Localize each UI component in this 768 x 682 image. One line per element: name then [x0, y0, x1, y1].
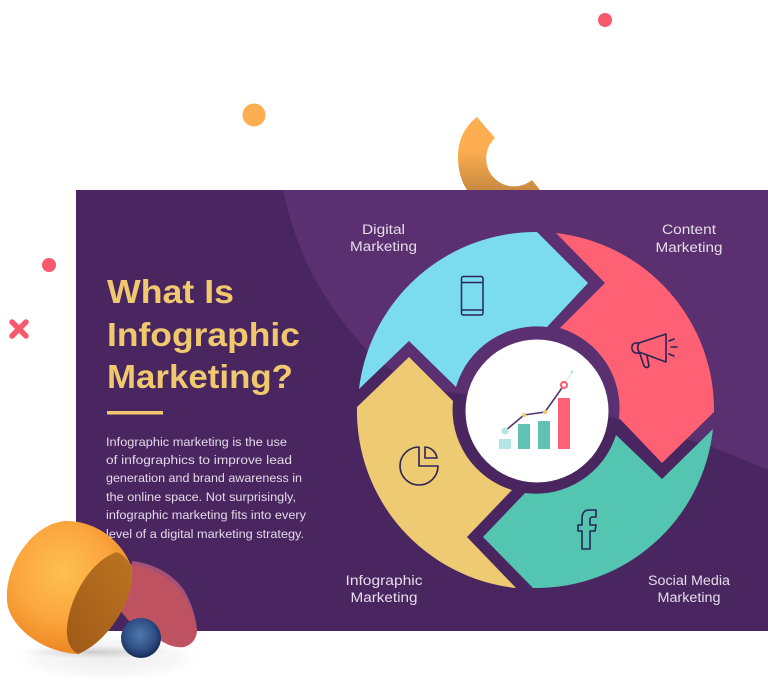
description text: Infographic marketing is the use — [106, 435, 287, 449]
panel: purple background — [76, 190, 768, 631]
title divider — [107, 411, 163, 414]
3D shapes group — [7, 521, 208, 682]
label: social media marketing: Social Media — [648, 573, 730, 589]
title — [107, 274, 300, 396]
label: digital marketing: Marketing — [350, 239, 417, 255]
decorative dot: red top — [598, 13, 612, 27]
description text — [106, 435, 307, 541]
label: content marketing — [656, 222, 722, 256]
label: social media marketing — [648, 573, 730, 606]
decorative cross — [12, 322, 26, 336]
label: digital marketing — [350, 222, 417, 255]
label: infographic marketing: Infographic — [346, 573, 422, 589]
decorative dot: orange — [242, 104, 266, 126]
label: digital marketing: Digital — [362, 222, 405, 238]
segment: digital marketing (blue) — [359, 232, 588, 389]
decorative dot: red left — [42, 258, 56, 272]
icon: pie chart — [400, 447, 438, 485]
description text: infographic marketing fits into every — [106, 508, 307, 522]
label: content marketing: Marketing — [656, 240, 722, 256]
segment: social media marketing (teal) — [483, 429, 713, 588]
pink half disc rim — [130, 561, 197, 630]
icon: phone — [462, 276, 483, 315]
icon: megaphone — [632, 334, 677, 368]
blue ball — [121, 618, 161, 658]
icon: growth chart — [499, 370, 574, 449]
title: Infographic — [107, 317, 300, 354]
pink half disc — [120, 564, 197, 647]
description text: the online space. Not surprisingly, — [106, 490, 296, 504]
title: What Is — [107, 274, 234, 311]
description text: generation and brand awareness in — [106, 471, 302, 485]
ground shadow — [8, 634, 208, 682]
ground contact shadow — [20, 645, 170, 659]
description text: of infographics to improve lead — [106, 453, 292, 467]
label: infographic marketing — [346, 573, 422, 606]
orange half sphere — [7, 521, 132, 654]
label: content marketing: Content — [662, 222, 716, 238]
label: social media marketing: Marketing — [658, 590, 720, 606]
icon: facebook f — [578, 510, 596, 549]
description text: level of a digital marketing strategy. — [106, 527, 304, 541]
orange cut face — [67, 552, 132, 654]
segment: content marketing (red) — [556, 233, 714, 463]
title: Marketing? — [107, 359, 293, 396]
label: infographic marketing: Marketing — [350, 590, 418, 606]
segment: infographic marketing (yellow) — [357, 357, 516, 588]
center circle — [466, 340, 608, 482]
orange crescent — [458, 117, 540, 190]
